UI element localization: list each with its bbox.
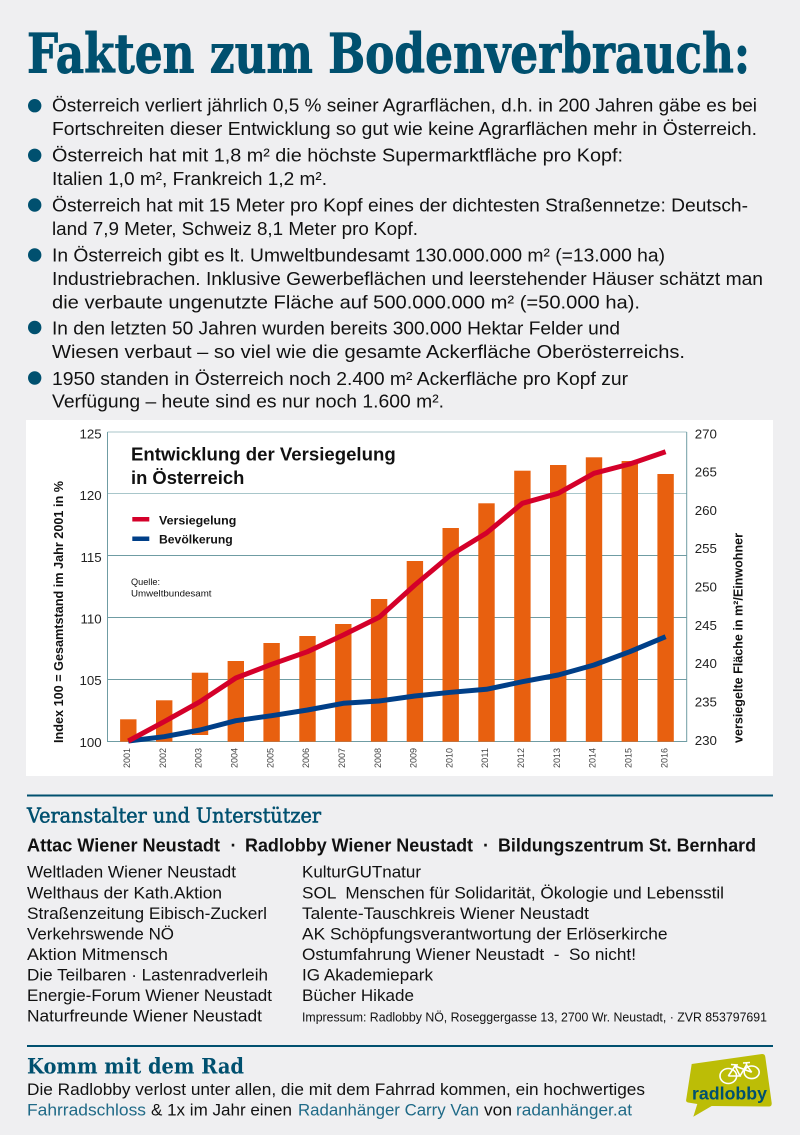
year labels: 2009 [409,748,420,768]
left axis numbers: 110 [80,612,102,626]
right axis numbers: 245 [695,618,717,633]
year labels: 2011 [480,748,491,768]
fact 4: In Österreich gibt es lt. Umweltbundesamt 130.000.000 m² (=13.000 ha) [52,244,665,266]
supporters right column: AK Schöpfungsverantwortung der Erlöserkirche [302,924,668,943]
right axis numbers [695,426,717,748]
year labels: 2001 [122,748,133,768]
fact 4: die verbaute ungenutzte Fläche auf 500.000.000 m² (=50.000 ha). [52,292,640,312]
supporters right column: IG Akademiepark [302,966,433,984]
panel: chart [26,420,773,776]
year labels: 2006 [301,748,312,768]
year labels: 2012 [516,748,527,768]
right axis numbers: 270 [695,426,717,441]
right axis numbers: 235 [695,694,717,709]
main organisers: · [230,836,236,856]
fact 3 [28,194,748,239]
year labels: 2016 [659,748,670,768]
main organisers [27,836,756,856]
fact 6: 1950 standen in Österreich noch 2.400 m² Ackerfläche pro Kopf zur [52,368,628,389]
line: Versiegelung [128,452,666,741]
year labels: 2003 [194,748,205,768]
right axis numbers: 255 [695,541,717,556]
fact 3: land 7,9 Meter, Schweiz 8,1 Meter pro Kopf. [52,218,418,239]
raffle text: & 1x im Jahr einen [151,1101,292,1120]
fact 4 [28,244,763,312]
year labels [122,748,670,768]
left axis title: Index 100 = Gesamtstand im Jahr 2001 in % [52,481,66,743]
supporters right column: Talente-Tauschkreis Wiener Neustadt [302,904,589,923]
supporters left column: Verkehrswende NÖ [27,924,174,943]
main organisers: Attac Wiener Neustadt [27,836,220,856]
fact 1: Österreich verliert jährlich 0,5 % seiner Agrarflächen, d.h. in 200 Jahren gäbe es bei [52,94,757,116]
year labels: 2005 [265,748,276,768]
fact 2: Österreich hat mit 1,8 m² die höchste Supermarktfläche pro Kopf: [52,144,623,166]
supporters right column: SOL Menschen für Solidarität, Ökologie und Lebensstil [302,883,724,902]
icon: radlobby logo: radlobby [692,1083,767,1103]
right axis numbers: 230 [695,733,717,748]
year labels: 2004 [230,748,240,768]
fact 2 [28,144,623,189]
left axis numbers: 100 [80,735,102,750]
supporters right column [302,863,767,1024]
legend [132,513,236,547]
chart title: in Österreich [131,467,244,488]
fact 3: Österreich hat mit 15 Meter pro Kopf eines der dichtesten Straßennetze: Deutsch- [52,194,748,216]
fact 5: Wiesen verbaut – so viel wie die gesamte Ackerfläche Oberösterreichs. [52,341,685,362]
legend: Bevölkerung [159,533,233,547]
chart title [131,444,396,488]
year labels: 2013 [552,748,563,768]
fact 6: Verfügung – heute sind es nur noch 1.600 m². [52,390,444,412]
fact 2: Italien 1,0 m², Frankreich 1,2 m². [52,168,327,189]
left axis numbers: 105 [80,673,102,688]
icon: radlobby logo [686,1054,772,1117]
source note [131,577,212,598]
supporters left column: Weltladen Wiener Neustadt [27,863,236,882]
main organisers: Radlobby Wiener Neustadt [245,836,473,856]
left axis numbers: 125 [80,426,102,441]
raffle text: Fahrradschloss [27,1101,146,1120]
fact 5 [28,318,685,362]
fact 1: Fortschreiten dieser Entwicklung so gut wie keine Agrarflächen mehr in Österreich. [52,118,757,139]
chart title: Entwicklung der Versiegelung [131,444,396,465]
main organisers: Bildungszentrum St. Bernhard [498,836,756,856]
right axis title: versiegelte Fläche in m²/Einwohner [732,533,746,743]
right axis numbers: 240 [695,656,717,671]
supporters left column: Aktion Mitmensch [27,945,168,964]
heading: Komm mit dem Rad: Komm mit dem Rad [27,1053,244,1078]
raffle text: radanhänger.at [516,1101,632,1120]
source note: Quelle: [131,577,160,587]
supporters left column: Straßenzeitung Eibisch-Zuckerl [27,904,267,923]
supporters left column: Energie-Forum Wiener Neustadt [27,986,272,1005]
year labels: 2015 [624,748,634,768]
raffle text [27,1080,645,1120]
fact list [28,94,763,412]
supporters left column: Naturfreunde Wiener Neustadt [27,1007,262,1026]
year labels: 2008 [373,748,384,768]
supporters right column: KulturGUTnatur [302,863,421,882]
left axis numbers: 115 [80,550,102,565]
year labels: 2002 [158,748,169,768]
raffle text: von [484,1101,512,1120]
supporters right column: Impressum: Radlobby NÖ, Roseggergasse 13, 2700 Wr. Neustadt, · ZVR 853797691 [302,1010,767,1024]
fact 6 [28,368,628,412]
fact 5: In den letzten 50 Jahren wurden bereits 300.000 Hektar Felder und [52,318,620,338]
right axis numbers: 250 [695,580,717,594]
left axis numbers: 120 [80,488,102,503]
legend: Versiegelung [159,513,236,527]
main organisers: · [483,836,489,856]
right axis numbers: 260 [695,503,717,518]
fact 1 [28,94,757,139]
year labels: 2010 [444,748,455,768]
line: Bevölkerung [128,637,666,741]
year labels: 2007 [337,748,348,768]
left axis numbers [80,426,102,750]
raffle text: Radanhänger Carry Van [298,1101,479,1120]
bars: versiegelte Fläche [120,457,674,742]
supporters right column: Bücher Hikade [302,986,414,1005]
supporters left column: Die Teilbaren · Lastenradverleih [27,966,268,984]
supporters left column: Welthaus der Kath.Aktion [27,883,222,902]
supporters right column: Ostumfahrung Wiener Neustadt - So nicht! [302,945,636,964]
raffle text: Die Radlobby verlost unter allen, die mit dem Fahrrad kommen, ein hochwertiges [27,1080,645,1099]
fact 4: Industriebrachen. Inklusive Gewerbeflächen und leerstehender Häuser schätzt man [52,268,763,289]
heading: Veranstalter und Unterstützer: Veranstalter und Unterstützer [26,804,321,828]
year labels: 2014 [588,748,599,768]
source note: Umweltbundesamt [131,588,212,598]
right axis numbers: 265 [695,465,717,480]
supporters left column [27,863,272,1026]
